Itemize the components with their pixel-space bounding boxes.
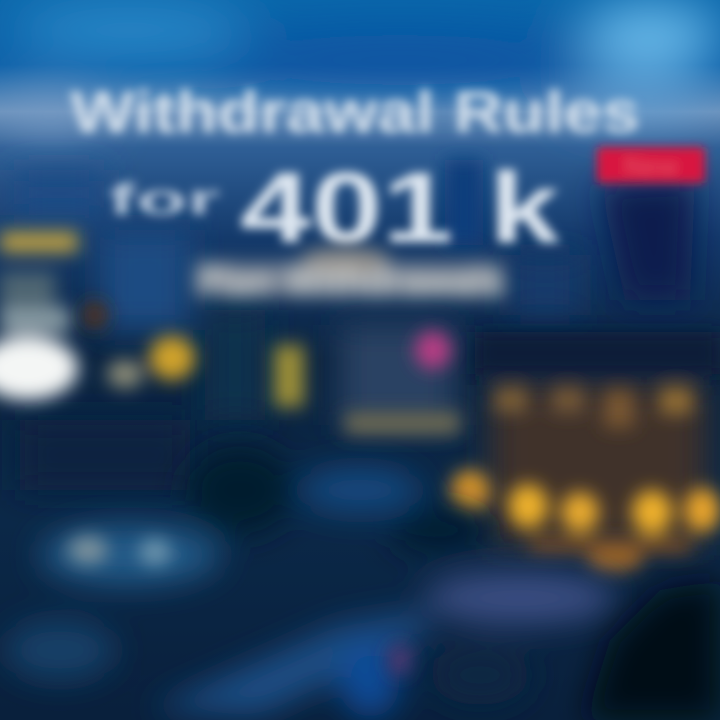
left side: bright white and yellow patches bbox=[0, 232, 78, 400]
tagline: Plan Withdrawals bbox=[195, 257, 505, 306]
building: lit hotel on the right bbox=[450, 332, 720, 572]
subtitle: for: for bbox=[108, 175, 220, 224]
sky highlights bbox=[0, 5, 720, 131]
red badge: New bbox=[624, 151, 679, 181]
skyline: dark towers bbox=[14, 170, 580, 490]
tower: navy tower under red badge bbox=[600, 180, 695, 300]
red badge bbox=[597, 147, 705, 183]
dark foreground corner bbox=[585, 580, 720, 720]
tower: blue tower behind 401k bbox=[445, 160, 483, 245]
accent lights: yellow and pink windows bbox=[83, 301, 460, 434]
title: Withdrawal Rules: Withdrawal Rules bbox=[70, 80, 640, 145]
headline: 401 k: 401 k bbox=[240, 152, 560, 264]
lower city: blue rooftops and streets bbox=[5, 445, 615, 718]
